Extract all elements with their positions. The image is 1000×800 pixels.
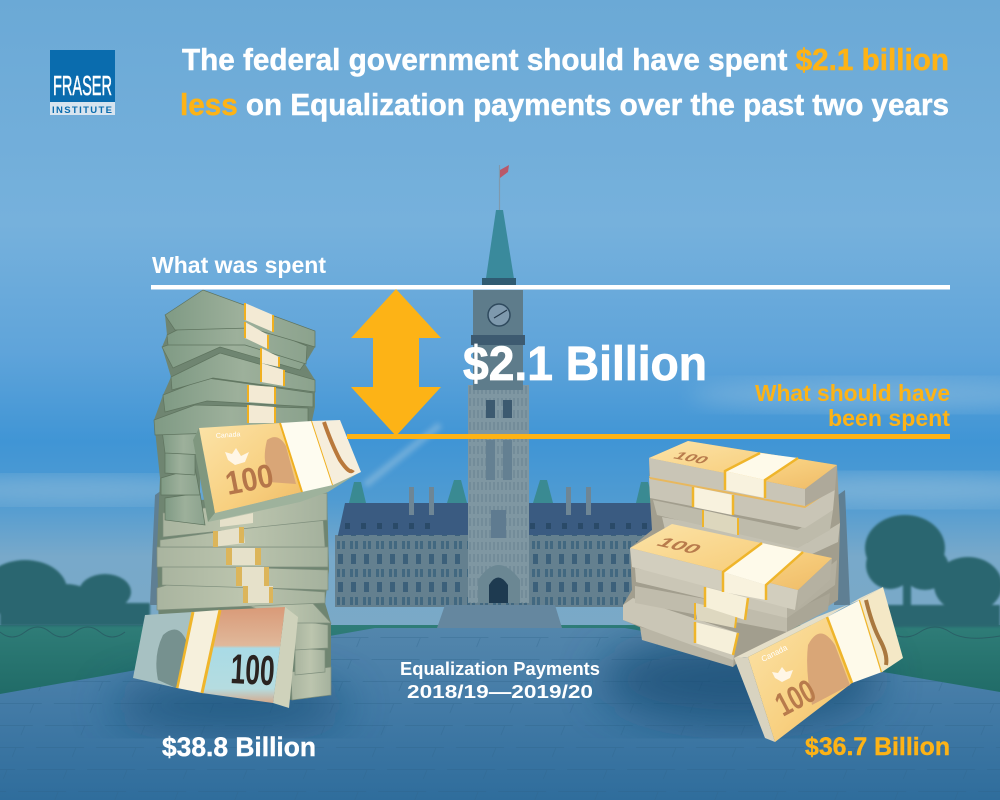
chart caption: Equalization Payments — [400, 659, 600, 679]
back bundle lower — [662, 517, 840, 555]
front bundle: tilted $100 note — [734, 587, 903, 742]
upper bundle bands — [245, 303, 284, 423]
stack silhouette — [623, 441, 840, 667]
label: Canada: Canada — [216, 431, 241, 440]
label: what was spent: What was spent — [152, 252, 326, 278]
band edges — [177, 610, 220, 693]
value: $38.8 billion: $38.8 Billion — [162, 732, 316, 762]
upper band edges — [245, 303, 284, 423]
steps — [437, 605, 562, 628]
shadows beneath money — [110, 635, 880, 729]
fifth bundle — [635, 560, 837, 620]
lowest bundle — [623, 598, 738, 667]
top bundle — [649, 441, 837, 506]
stack silhouette — [154, 290, 331, 700]
chart caption: 2018/19—2019/20 — [407, 682, 593, 702]
central tower — [468, 165, 529, 603]
front bundle: Canada $100 portrait note — [133, 607, 298, 708]
portrait — [156, 630, 186, 688]
portrait — [807, 634, 850, 705]
label: what should have been spent: been spent — [828, 405, 950, 431]
label: Canada: Canada — [760, 643, 789, 664]
label: what should have been spent: What should have — [755, 380, 950, 406]
paper band — [280, 421, 333, 492]
label: 100: 100 — [230, 645, 276, 694]
title — [180, 42, 949, 122]
back bundle middle — [653, 500, 833, 548]
label: 100: 100 — [222, 456, 276, 502]
background: trees and lawn — [0, 515, 1000, 700]
label: what should have been spent — [755, 380, 950, 431]
money stack: left, $38.8 billion — [133, 290, 361, 708]
featured middle bundle — [630, 524, 832, 610]
bundle side — [193, 428, 215, 522]
featured bundle: Canada $100 yellow note — [193, 420, 361, 522]
illustration: Parliament building — [150, 165, 850, 628]
label: 100: 100 — [669, 450, 713, 466]
logo sub-wordmark: INSTITUTE — [52, 105, 112, 116]
label: 100: 100 — [769, 672, 822, 723]
sixth bundle — [635, 586, 830, 632]
background: stone plaza — [0, 628, 1000, 800]
label: 100: 100 — [652, 535, 707, 557]
background: sky — [0, 0, 1000, 640]
line: what should have been spent — [347, 434, 950, 439]
title line one: The federal government should have spent $2.1 billion — [182, 42, 949, 77]
lower bundles — [157, 493, 331, 700]
lower bundle bands — [213, 513, 273, 603]
second bundle — [649, 476, 835, 528]
money stack: right, $36.7 billion — [623, 441, 903, 742]
value: $36.7 billion: $36.7 Billion — [805, 733, 950, 761]
logo wordmark: FRASER — [53, 70, 112, 101]
line: what was spent — [151, 285, 950, 290]
chart caption — [400, 659, 600, 702]
arrow: difference between spending lines — [351, 289, 441, 436]
lower band edges — [213, 527, 273, 603]
note face — [199, 423, 302, 513]
title line two: less on Equalization payments over the past two years — [180, 87, 949, 122]
side tower left — [150, 490, 165, 605]
upper bundles — [154, 290, 315, 525]
roof — [338, 503, 660, 535]
callout: $2.1 billion: $2.1 Billion — [463, 338, 707, 391]
maple leaf — [225, 448, 249, 465]
paper band — [177, 610, 220, 693]
band edges — [280, 421, 333, 492]
dormers and chimneys — [345, 480, 654, 526]
logo: Fraser Institute — [50, 50, 115, 116]
note end — [312, 420, 361, 485]
maple leaf — [772, 667, 793, 682]
portrait — [265, 437, 296, 484]
side tower right — [834, 490, 850, 605]
building walls — [335, 535, 660, 607]
